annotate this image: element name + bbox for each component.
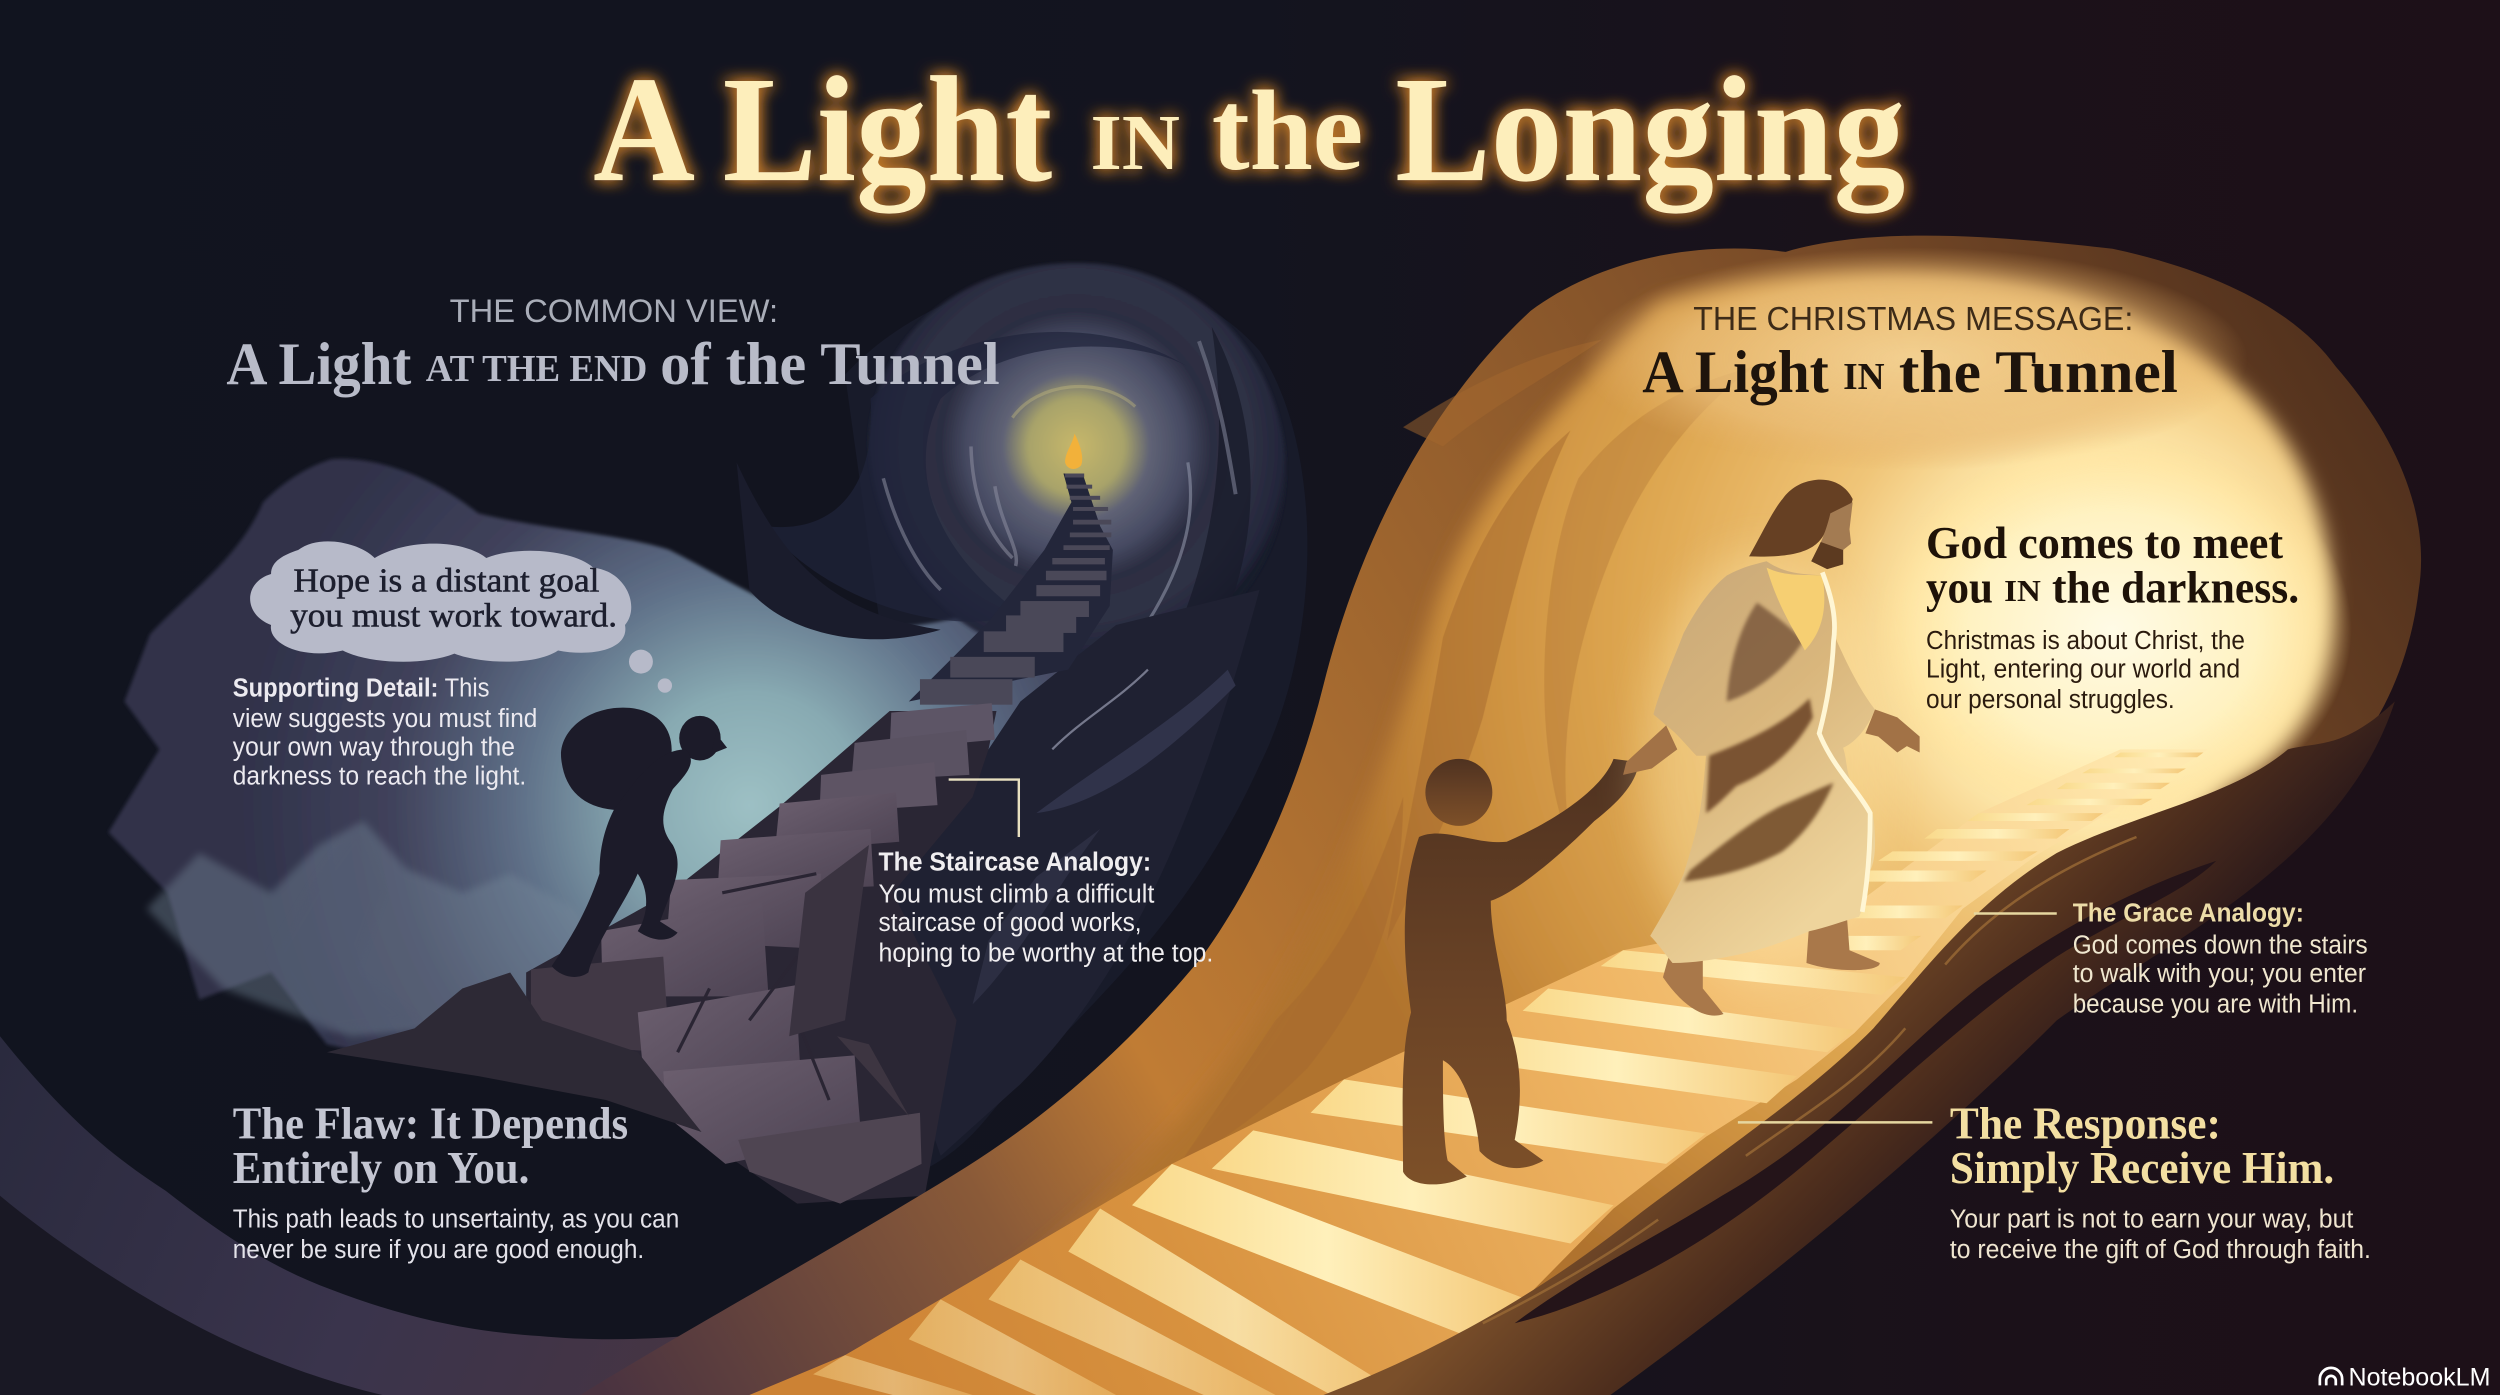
section title: A Light xyxy=(1642,339,1829,406)
text: God comes to meet you xyxy=(1926,518,2299,714)
robe xyxy=(1650,561,1875,963)
text: supporting detail: view suggests you must find xyxy=(233,703,537,733)
section title: AT THE END xyxy=(426,348,647,390)
text: the response xyxy=(1950,1098,2371,1264)
section title: the Tunnel xyxy=(1899,339,2178,406)
text: staircase analogy: The Staircase Analogy: xyxy=(879,846,1151,876)
title: IN xyxy=(1091,99,1180,187)
cave floor band xyxy=(0,1036,989,1395)
statement heading: the darkness. xyxy=(2052,563,2299,613)
section title xyxy=(1642,339,2178,406)
thought bubbles xyxy=(629,650,653,674)
text: supporting detail xyxy=(233,673,537,790)
distant stairs xyxy=(909,474,1113,705)
lit stair base xyxy=(749,749,2208,1395)
hands xyxy=(1623,709,1920,775)
flaw body: never be sure if you are good enough. xyxy=(233,1234,644,1264)
response heading: The Response: xyxy=(1950,1098,2221,1148)
staircase treads xyxy=(813,753,2203,1395)
flaw heading: Entirely on You. xyxy=(233,1143,529,1193)
section title: A Light xyxy=(226,331,411,398)
text: supporting detail: Supporting Detail: This xyxy=(233,673,489,703)
robe lit edge xyxy=(1819,572,1870,912)
eyebrow: THE CHRISTMAS MESSAGE: xyxy=(1693,301,2133,338)
feet xyxy=(1663,909,1880,1016)
text: the flaw xyxy=(233,1098,679,1264)
section title: of the Tunnel xyxy=(660,331,1000,398)
text: staircase analogy: hoping to be worthy at the top. xyxy=(879,937,1213,967)
robe folds xyxy=(1727,603,1803,701)
dark tunnel rim xyxy=(797,275,1307,1182)
rock highlights xyxy=(1483,837,2136,1323)
connector: staircase callout xyxy=(949,780,1019,837)
panel: left cave scene xyxy=(0,263,1307,1395)
heading: christmas message xyxy=(1642,301,2178,406)
tunnel light core xyxy=(1873,435,2352,824)
response body: to receive the gift of God through faith. xyxy=(1950,1234,2371,1264)
eyebrow: THE COMMON VIEW: xyxy=(450,292,778,329)
panel: right warm cave scene xyxy=(580,236,2421,1395)
hair xyxy=(1749,480,1853,557)
thought text xyxy=(290,561,617,635)
flaw body: This path leads to unsertainty, as you can xyxy=(233,1204,679,1234)
heading: common view xyxy=(226,292,1000,398)
text: staircase analogy: You must climb a difficult xyxy=(879,878,1155,908)
connector: response callout xyxy=(1738,1121,1932,1123)
logo: NotebookLM xyxy=(2320,1364,2490,1391)
lit cave interior xyxy=(861,275,2331,1395)
statement heading: you xyxy=(1926,563,1993,613)
thought cloud xyxy=(250,541,672,693)
header glow xyxy=(1578,247,2248,470)
figure: person reaching up xyxy=(1403,759,1639,1184)
thought text: Hope is a distant goal xyxy=(293,561,599,599)
title: A Light xyxy=(593,45,1052,213)
text: staircase analogy: staircase of good works, xyxy=(879,907,1142,937)
text: grace analogy xyxy=(2073,897,2368,1018)
text: supporting detail: your own way through the xyxy=(233,732,515,762)
statement heading xyxy=(1926,518,2299,613)
text: grace analogy: to walk with you; you enter xyxy=(2073,958,2366,988)
section title xyxy=(226,331,1000,398)
glowing halo xyxy=(1642,550,1881,980)
right dark rock mass xyxy=(874,590,1260,1156)
text: grace analogy: God comes down the stairs xyxy=(2073,929,2368,959)
text: grace analogy: The Grace Analogy: xyxy=(2073,897,2304,927)
connector: grace callout xyxy=(1974,913,2057,915)
face and beard xyxy=(1811,502,1853,569)
cave wall folds xyxy=(1180,340,1754,1164)
robe lit shoulder xyxy=(1767,568,1824,650)
icon: arcs xyxy=(2320,1368,2342,1385)
distant mountains xyxy=(147,821,606,1036)
text: staircase analogy xyxy=(879,846,1213,967)
response body xyxy=(1950,1204,2371,1264)
flaw heading xyxy=(233,1098,628,1193)
response body: Your part is not to earn your way, but xyxy=(1950,1204,2354,1234)
statement heading: God comes to meet xyxy=(1926,518,2283,568)
section title: IN xyxy=(1843,356,1885,398)
statement body: Christmas is about Christ, the xyxy=(1926,625,2245,655)
climbing man with backpack xyxy=(552,708,727,977)
statement body: Light, entering our world and xyxy=(1926,654,2240,684)
text: grace analogy: because you are with Him. xyxy=(2073,988,2358,1018)
dark lower corner xyxy=(0,1196,383,1395)
mountain shadow xyxy=(271,823,418,1033)
statement body xyxy=(1926,625,2245,714)
rubble xyxy=(327,973,702,1132)
figure: Jesus in robe xyxy=(1623,480,1920,1016)
misty valley xyxy=(108,459,1140,1100)
outer cave wall xyxy=(580,236,2421,1395)
rock band xyxy=(1323,701,2395,1395)
response heading xyxy=(1950,1098,2334,1193)
statement body: our personal struggles. xyxy=(1926,684,2175,714)
thought text: you must work toward. xyxy=(290,597,617,635)
rock crack xyxy=(1515,861,2216,1323)
text: supporting detail: darkness to reach the light. xyxy=(233,760,526,790)
flaw body xyxy=(233,1204,679,1264)
title xyxy=(593,45,1905,213)
title: Longing xyxy=(1395,45,1905,213)
flaw heading: The Flaw: It Depends xyxy=(233,1098,628,1148)
title: the xyxy=(1212,67,1363,194)
response heading: Simply Receive Him. xyxy=(1950,1143,2334,1193)
swirling tunnel xyxy=(737,263,1286,1156)
statement heading: IN xyxy=(2004,574,2041,608)
stone staircase xyxy=(526,703,996,1204)
candle flame light xyxy=(1065,434,1082,469)
wordmark: NotebookLM xyxy=(2349,1364,2490,1391)
